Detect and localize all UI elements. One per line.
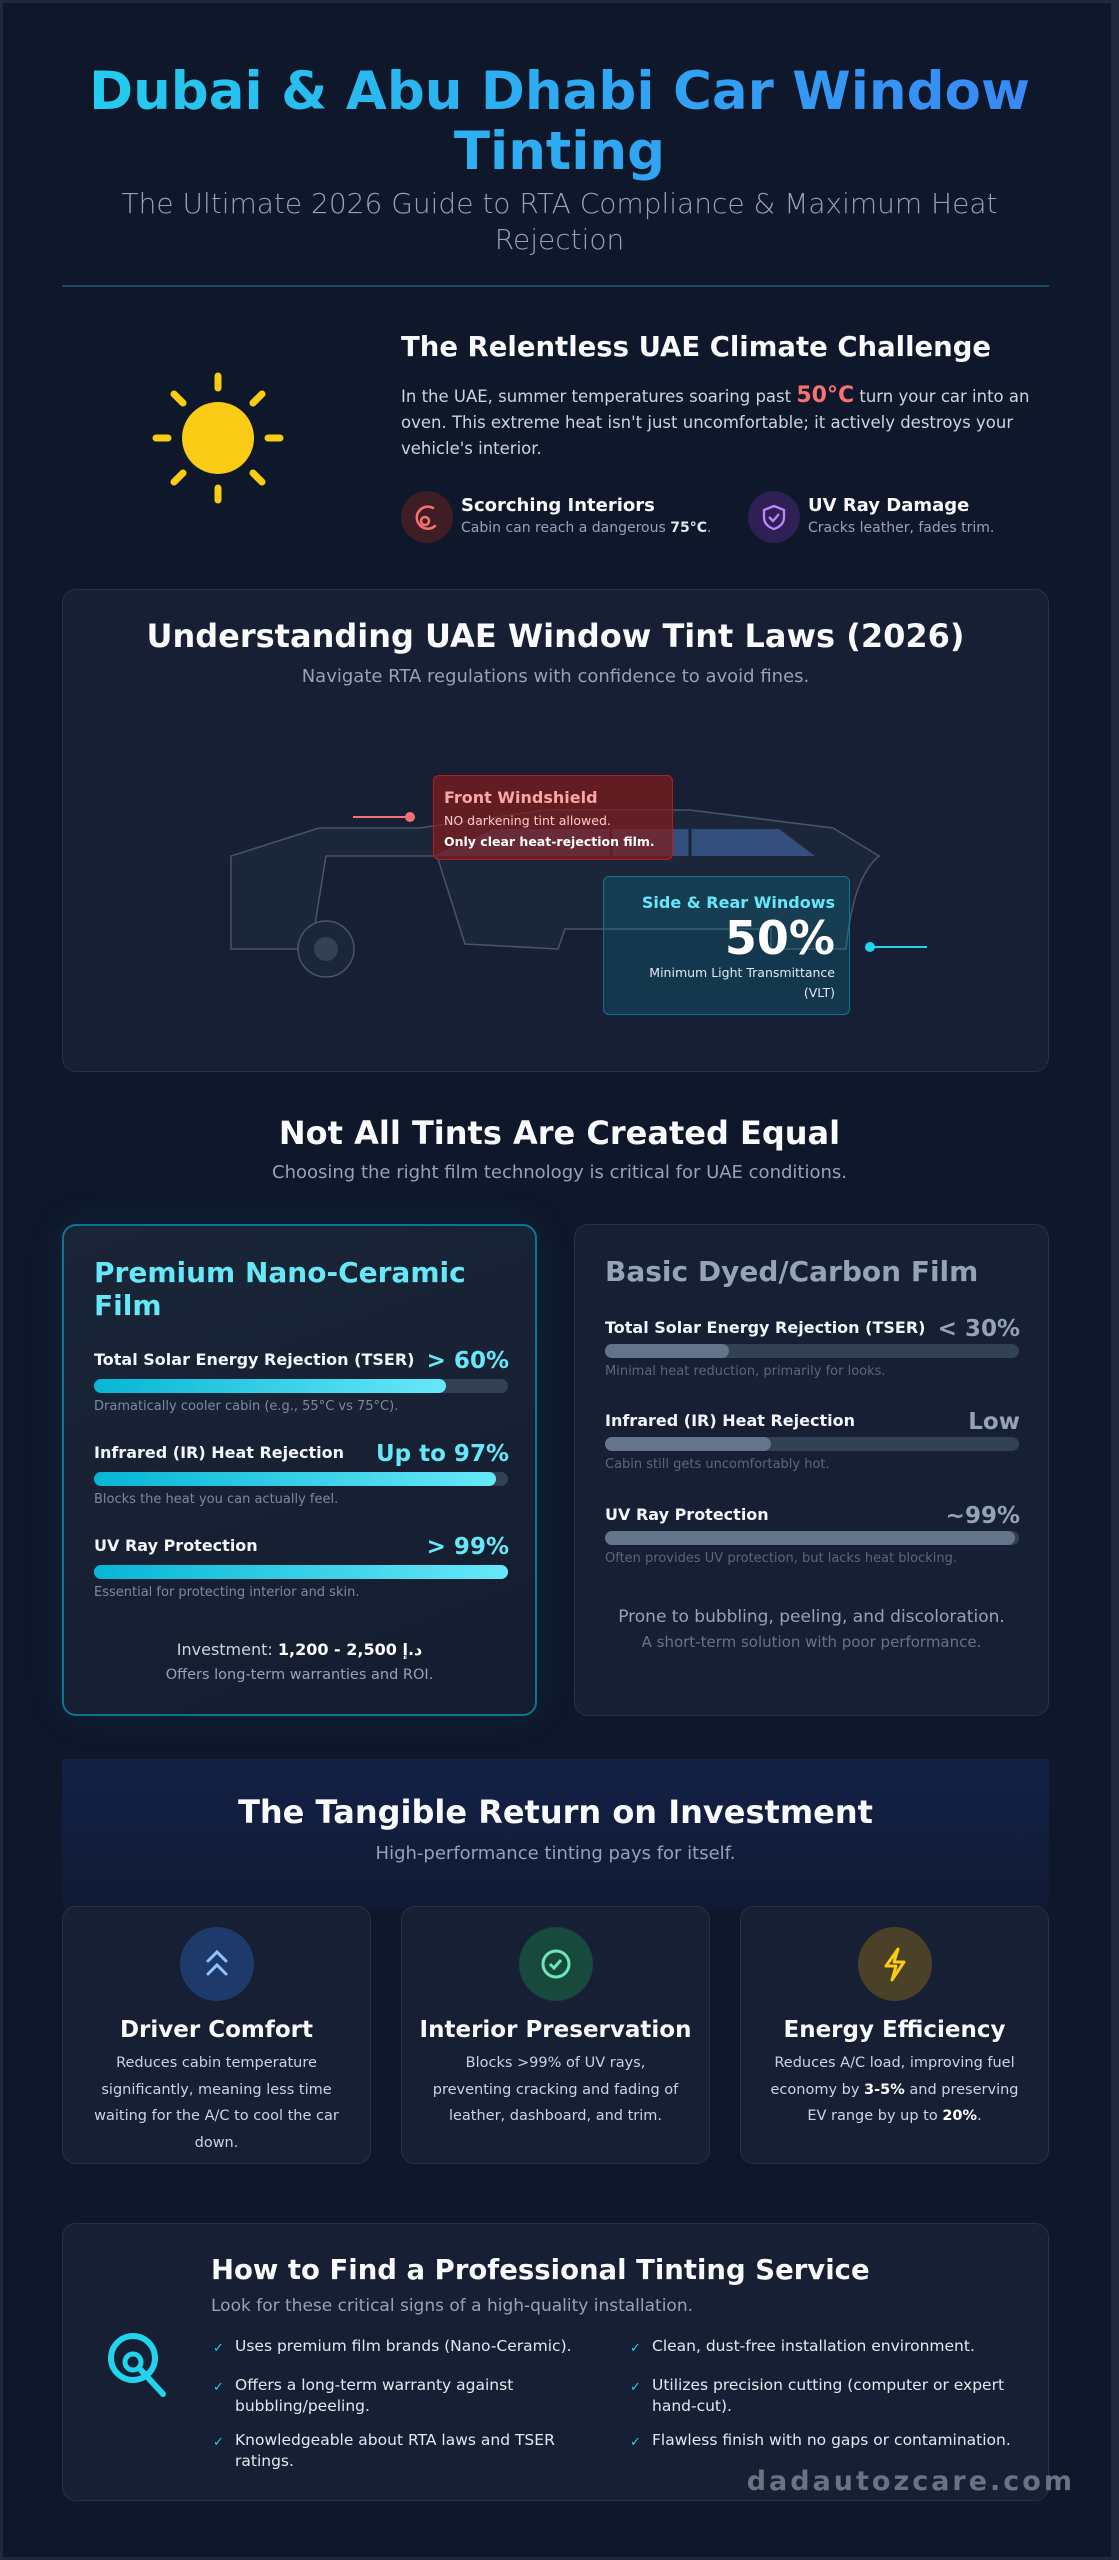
text: investment: Investment: 1,200 - 2,500 د.إ [177,1640,422,1659]
card title: basic: Basic Dyed/Carbon Film [605,1255,978,1288]
heading: find service: How to Find a Professional Tinting Service [211,2254,870,2286]
metric: tser basic [605,1316,1020,1379]
title [0,62,1119,182]
metric: uv: Essential for protecting interior and skin. [94,1585,359,1600]
callout: front windshield: NO darkening tint allowed. [444,813,611,828]
metric: tser: Dramatically cooler cabin (e.g., 55°C vs 75°C). [94,1399,398,1414]
metric: uv basic [605,1503,1020,1566]
heading: tint laws: Understanding UAE Window Tint Laws (2026) [146,617,965,655]
card: interior preservation: Interior Preservation [420,2017,691,2043]
text: drawbacks [618,1607,1005,1651]
callout: scorching interiors: Scorching Interiors [461,495,655,516]
metric: ir: Infrared (IR) Heat Rejection [94,1443,344,1462]
heading: roi: The Tangible Return on Investment [238,1793,873,1831]
subtitle: roi: High-performance tinting pays for itself. [376,1843,735,1864]
icon: sun [152,372,284,504]
title: Tinting [454,121,665,182]
panel: premium nano-ceramic [62,1224,537,1716]
metric: ir basic: Infrared (IR) Heat Rejection [605,1411,855,1430]
checklist: Knowledgeable about RTA laws and TSER ratings. [235,2431,555,2470]
checklist: ✓ [213,2380,224,2395]
icon: magnifier [108,2333,166,2397]
callout: front windshield [433,775,673,860]
card: interior preservation: Blocks >99% of UV rays, [466,2055,645,2071]
metric: uv basic: ~99% [946,1503,1020,1529]
metric: ir: Blocks the heat you can actually feel. [94,1492,338,1507]
text: drawbacks: A short-term solution with poor performance. [642,1633,981,1651]
metric: tser basic: < 30% [938,1316,1020,1342]
text: investment [166,1640,433,1683]
text: climate paragraph: In the UAE, summer temperatures soaring past 50°C turn your car into an oven. This extreme heat isn't just uncomfortable; it actively destroys your vehicle's interior. [401,383,1029,458]
checklist: Clean, dust-free installation environment. [652,2337,975,2355]
callout: side & rear windows: Minimum Light Transmittance (VLT) [649,965,835,1000]
icon: heat [401,491,453,543]
checklist: ✓ [630,2341,641,2356]
checklist: ✓ [630,2435,641,2450]
card title: premium: Premium Nano-Ceramic Film [94,1256,466,1322]
icon: check circle [518,1927,592,2001]
checklist: ✓ [213,2341,224,2356]
metric: uv basic: Often provides UV protection, but lacks heat blocking. [605,1551,957,1566]
title: Dubai & Abu Dhabi Car Window [89,61,1030,122]
callout: front windshield: Only clear heat-rejection film. [444,834,655,849]
panel: roi header [62,1759,1049,1909]
metric: uv [94,1534,509,1600]
metric: tser basic: Minimal heat reduction, primarily for looks. [605,1364,886,1379]
metric: uv basic: UV Ray Protection [605,1505,769,1524]
card: interior preservation [401,1906,710,2164]
subtitle: find service: Look for these critical signs of a high-quality installation. [211,2296,693,2316]
checklist: ✓ [630,2380,641,2395]
card: driver comfort: Driver Comfort [120,2017,313,2043]
callout: side & rear windows: 50% [725,911,835,965]
metric: ir: Up to 97% [376,1441,509,1467]
card: interior preservation: preventing cracking and fading of leather, dashboard, and trim. [433,2082,678,2124]
panel: tint laws [62,589,1049,1072]
callout: uv ray damage [748,491,994,543]
car diagram [230,809,927,978]
callout: side & rear windows: Side & Rear Windows [642,893,835,912]
card: driver comfort: Reduces cabin temperature significantly, meaning less time waiting for the A/C to cool the car down. [94,2055,339,2150]
icon: chevrons [180,1927,254,2001]
text: investment: Offers long-term warranties and ROI. [166,1667,433,1683]
checklist: Uses premium film brands (Nano-Ceramic). [235,2337,572,2355]
icon: shield [748,491,800,543]
checklist: ✓ [213,2435,224,2450]
callout: uv ray damage: UV Ray Damage [808,495,969,516]
metric: ir basic: Cabin still gets uncomfortably hot. [605,1457,830,1472]
footer: website: dadautozcare.com [747,2466,1075,2497]
metric: tser: Total Solar Energy Rejection (TSER) [94,1350,414,1369]
metric: tser [94,1348,509,1414]
callout: scorching interiors: Cabin can reach a dangerous 75°C. [461,520,711,536]
callout: scorching interiors [401,491,711,543]
card: energy efficiency: Reduces A/C load, improving fuel economy by 3-5% and preserving EV range by up to 20%. [770,2055,1018,2124]
card: driver comfort [62,1906,371,2164]
card: energy efficiency [740,1906,1049,2164]
metric: ir [94,1441,509,1507]
panel: basic dyed film [574,1224,1049,1716]
subtitle: tint laws: Navigate RTA regulations with confidence to avoid fines. [302,666,809,687]
checklist: Utilizes precision cutting (computer or expert hand-cut). [652,2376,1004,2415]
subtitle: comparison: Choosing the right film technology is critical for UAE conditions. [272,1162,847,1183]
text: drawbacks: Prone to bubbling, peeling, and discoloration. [618,1607,1005,1627]
callout: side & rear windows [603,876,850,1015]
callout: front windshield: Front Windshield [444,788,598,807]
callout: uv ray damage: Cracks leather, fades trim. [808,520,994,536]
panel: find a service [62,2223,1049,2501]
metric: uv: UV Ray Protection [94,1536,258,1555]
metric: tser basic: Total Solar Energy Rejection (TSER) [605,1318,925,1337]
card: energy efficiency: Energy Efficiency [784,2017,1005,2043]
heading: comparison: Not All Tints Are Created Equal [279,1114,840,1152]
metric: uv: > 99% [427,1534,509,1560]
metric: ir basic [605,1409,1020,1472]
heading: climate challenge: The Relentless UAE Climate Challenge [401,331,991,363]
checklist: Offers a long-term warranty against bubbling/peeling. [235,2376,513,2415]
metric: tser: > 60% [427,1348,509,1374]
checklist: Flawless finish with no gaps or contamination. [652,2431,1011,2449]
checklist [213,2337,1011,2470]
metric: ir basic: Low [968,1409,1020,1435]
icon: lightning [858,1927,932,2001]
subtitle: The Ultimate 2026 Guide to RTA Compliance & Maximum Heat Rejection [122,187,997,256]
